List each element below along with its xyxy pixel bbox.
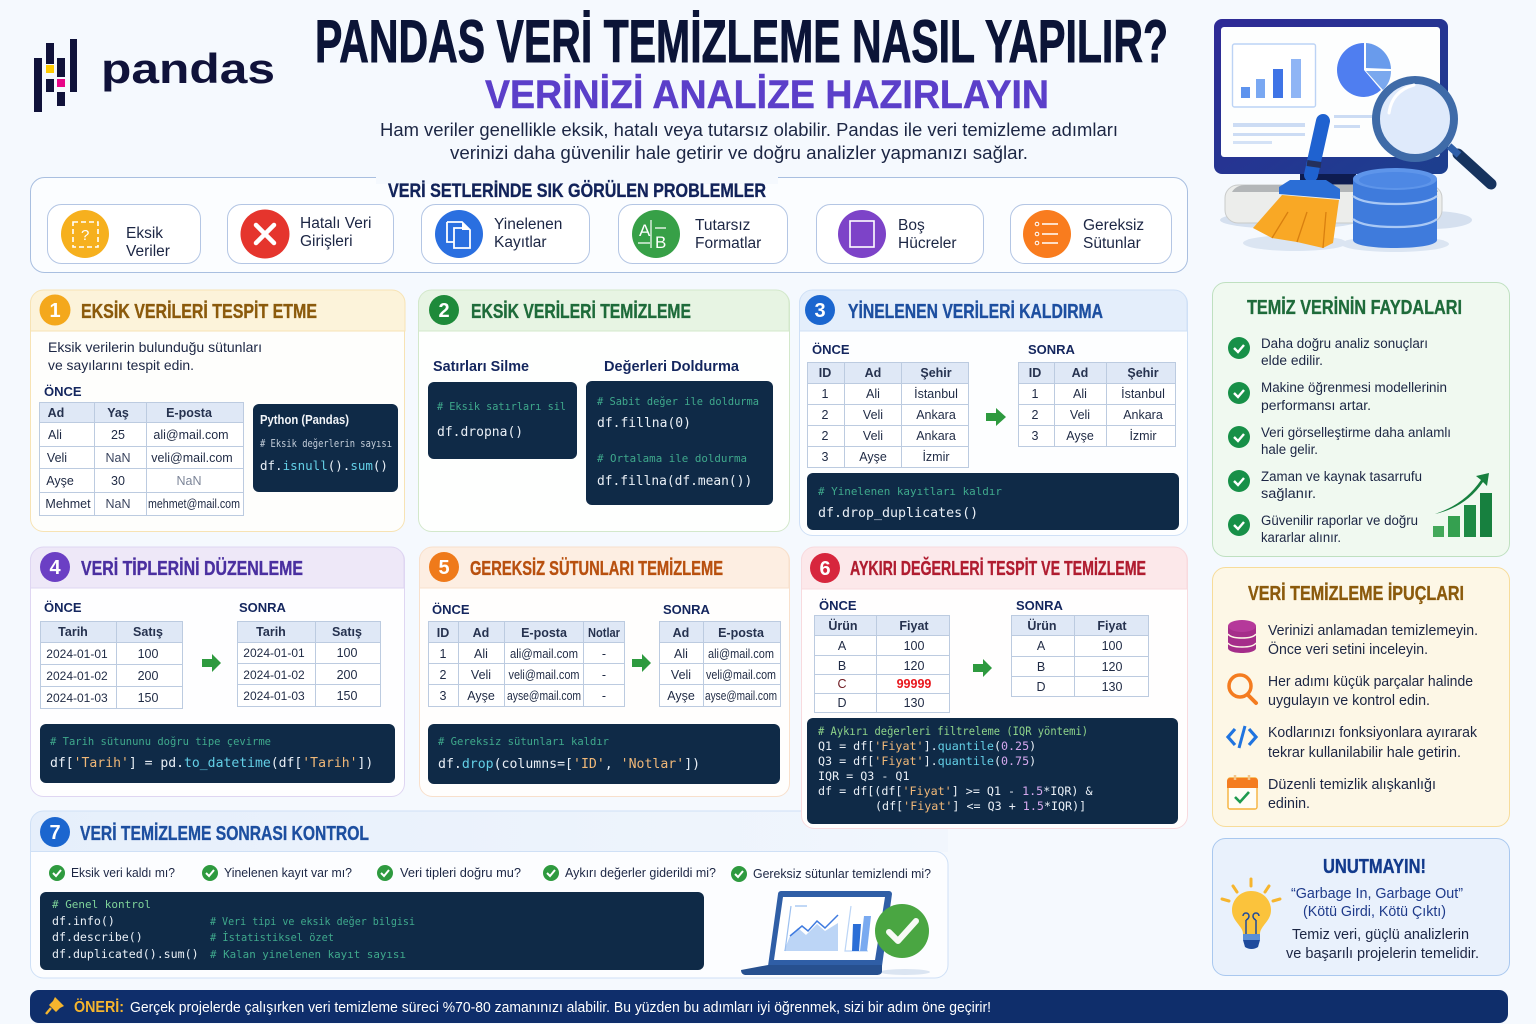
table: after 5: Veli [671, 668, 691, 682]
badge 2: 2 [438, 300, 450, 322]
code block 7: # Veri tipi ve eksik değer bilgisi [210, 915, 415, 928]
code block 7 [40, 892, 704, 970]
badge 6: 6 [819, 558, 831, 580]
panel 2: clean missing data [418, 290, 790, 532]
table: before 6: 99999 [897, 677, 931, 691]
tip 2 [1229, 674, 1473, 709]
code block 5 [428, 724, 780, 784]
table: before 5: ali@mail.com [510, 647, 578, 661]
table: before 1: E-posta [166, 406, 213, 420]
panel 5: remove columns [420, 547, 790, 796]
table: after 3: Ankara [1123, 408, 1163, 422]
panel 3 header [800, 290, 1187, 331]
code block 7: df.info() [52, 914, 115, 928]
badge 4 [40, 552, 70, 582]
code block 4: # Tarih sütununu doğru tipe çevirme [50, 735, 271, 748]
badge 1 [40, 294, 70, 326]
problem card: empty cells: Boş [898, 217, 925, 234]
problem card: missing data: ? [81, 227, 89, 244]
table: after 3: Ayşe [1066, 429, 1094, 443]
table: before 1: ali@mail.com [153, 428, 229, 442]
code block 6: (df['Fiyat'] <= Q3 + 1.5*IQR)] [875, 799, 1086, 813]
table: before 1: Ad [48, 406, 64, 420]
table: after 4: 2024-01-03 [243, 689, 305, 703]
heading 1: EKSİK VERİLERİ TESPİT ETME [81, 300, 317, 323]
benefit 5 [1228, 513, 1418, 545]
heading: benefits: TEMİZ VERİNİN FAYDALARI [1247, 296, 1462, 319]
table: before 5 [428, 622, 624, 706]
code block 4: df['Tarih'] = pd.to_datetime(df['Tarih']) [50, 756, 373, 771]
badge 3 [805, 295, 835, 325]
table: after 3: Ali [1073, 387, 1087, 401]
code block 1: Python (Pandas) [260, 413, 349, 427]
table: before 3 [808, 362, 968, 468]
tip 1: Önce veri setini inceleyin. [1268, 640, 1428, 658]
illustration: laptop with check [741, 891, 930, 975]
benefit 3: Veri görselleştirme daha anlamlı [1261, 425, 1451, 440]
tip 2: Her adımı küçük parçalar halinde [1268, 674, 1473, 690]
table: before 6: C [837, 677, 847, 691]
heading 2: EKSİK VERİLERİ TEMİZLEME [471, 300, 691, 323]
benefit 2: performansı artar. [1261, 398, 1371, 413]
code block 5: # Gereksiz sütunları kaldır [438, 735, 609, 748]
table: after 4: Satış [332, 625, 362, 639]
table: after 3: İzmir [1129, 429, 1157, 443]
panel: remember [1212, 838, 1510, 976]
code block 6: IQR = Q3 - Q1 [818, 769, 909, 783]
table: before 5: Ayşe [467, 689, 495, 703]
bottom bar: tip [30, 990, 1508, 1023]
table: before 5: ayse@mail.com [507, 689, 581, 703]
logo: pandas: pandas [101, 45, 275, 92]
label: before: ÖNCE [819, 598, 857, 613]
table: before 5: - [602, 668, 606, 682]
table: before 3: ID [819, 366, 831, 380]
table: before 1: NaN [176, 474, 202, 488]
code block 7: df.duplicated().sum() [52, 947, 199, 961]
table: after 4: 200 [337, 668, 357, 682]
code block 5: df.drop(columns=['ID', 'Notlar']) [438, 757, 700, 772]
table: before 1: 25 [111, 428, 125, 442]
badge 5: 5 [438, 557, 450, 579]
table: before 1: Veli [47, 451, 67, 465]
table: before 5: Ali [474, 647, 488, 661]
table: after 4 [238, 622, 380, 706]
intro text [380, 120, 1118, 163]
panel 5 header [420, 547, 789, 588]
problem card: empty cells: Hücreler [898, 235, 957, 252]
note: Temiz veri, güçlü analizlerin [1292, 926, 1469, 943]
heading: problems: VERİ SETLERİNDE SIK GÖRÜLEN PROBLEMLER [388, 181, 766, 202]
code block 7: # Genel kontrol [52, 898, 151, 911]
table: before 4: 2024-01-02 [46, 669, 108, 683]
tip 1 [1228, 620, 1478, 658]
benefit 3 [1228, 425, 1451, 457]
code block 1 [253, 404, 398, 492]
problem card: missing data: Veriler [126, 243, 170, 260]
intro text: verinizi daha güvenilir hale getirir ve doğru analizler yapmanızı sağlar. [450, 143, 1028, 163]
subheading: fill values: Değerleri Doldurma [604, 359, 740, 375]
badge 7: 7 [49, 822, 61, 844]
table: before 1: veli@mail.com [151, 451, 233, 465]
table: before 4: 2024-01-03 [46, 691, 108, 705]
label: after: SONRA [663, 602, 711, 617]
table: before 1: Yaş [107, 406, 129, 420]
table: before 1: 30 [111, 474, 125, 488]
panel 1: detect missing data [30, 290, 405, 532]
table: before 3: İstanbul [914, 387, 958, 401]
panel 4: data types [30, 547, 404, 796]
table: after 3: ID [1029, 366, 1041, 380]
logo: pandas [34, 39, 275, 112]
tip text: Gerçek projelerde çalışırken veri temizleme süreci %70-80 zamanınızı alabilir. Bu yüzden bu adımları iyi öğrenmek, sizi bir adım öne geçirir! [130, 1000, 991, 1016]
table: before 6: A [838, 639, 847, 653]
subheading: drop rows: Satırları Silme [433, 359, 529, 375]
table: after 6: 120 [1102, 660, 1122, 674]
table: after 4: 2024-01-01 [243, 646, 305, 660]
table: after 6: Ürün [1027, 618, 1057, 633]
tip 3 [1228, 725, 1478, 761]
table: before 3: İzmir [922, 450, 950, 464]
code block 7: # Kalan yinelenen kayıt sayısı [210, 948, 406, 961]
checklist: Aykırı değerler giderildi mi? [565, 865, 716, 880]
badge 5 [429, 552, 459, 582]
table: before 3: Ankara [916, 408, 956, 422]
code block 3: # Yinelenen kayıtları kaldır [818, 485, 1002, 498]
table: before 5: ID [437, 626, 449, 640]
arrow [202, 654, 221, 672]
table: before 1: Ayşe [46, 474, 74, 488]
code block 7: # İstatistiksel özet [210, 931, 334, 944]
table: after 6 [1012, 616, 1148, 696]
problem card: inconsistent formats: Tutarsız [695, 217, 750, 234]
table: before 4: 2024-01-01 [46, 647, 108, 661]
table: after 3: 3 [1032, 429, 1039, 443]
table: after 4: 2024-01-02 [243, 668, 305, 682]
checklist: Veri tipleri doğru mu? [400, 865, 521, 880]
title: PANDAS VERİ TEMİZLEME NASIL YAPILIR? [315, 8, 1168, 75]
table: before 1: Ali [48, 428, 62, 442]
tip 4: Düzenli temizlik alışkanlığı [1268, 777, 1436, 793]
description 1: ve sayılarını tespit edin. [48, 357, 194, 373]
table: before 5: Veli [471, 668, 491, 682]
icon: pin [46, 997, 64, 1014]
panel: common problems [30, 172, 1188, 272]
table: before 3: 2 [822, 429, 829, 443]
checklist: Gereksiz sütunlar temizlendi mi? [753, 866, 931, 881]
table: before 3: 3 [822, 450, 829, 464]
problem card: missing data: Eksik [126, 225, 163, 242]
code block 1: # Eksik değerlerin sayısı [260, 437, 392, 450]
heading 3: YİNELENEN VERİLERİ KALDIRMA [848, 300, 1103, 323]
table: before 1: NaN [105, 451, 131, 465]
table: after 4: Tarih [256, 625, 286, 639]
table: after 5: ali@mail.com [708, 647, 774, 661]
table: before 6: Fiyat [899, 619, 929, 633]
badge 7 [40, 817, 70, 847]
benefit 5: kararlar alınır. [1261, 530, 1341, 545]
panel 2 header [418, 290, 789, 331]
table: after 3: 1 [1032, 387, 1039, 401]
label: after: SONRA [1028, 342, 1076, 357]
table: after 3: 2 [1032, 408, 1039, 422]
badge 4: 4 [49, 557, 61, 579]
table: before 6 [814, 616, 950, 712]
label: before: ÖNCE [432, 602, 470, 617]
code block 6: # Aykırı değerleri filtreleme (IQR yöntemi) [818, 724, 1088, 738]
description 1 [48, 339, 262, 373]
table: before 3: 2 [822, 408, 829, 422]
label: after: SONRA [1016, 598, 1064, 613]
panel 6: outliers [802, 547, 1188, 828]
table: after 6: D [1036, 680, 1046, 694]
code block: fillna: # Sabit değer ile doldurma [597, 395, 759, 408]
arrow [986, 408, 1006, 426]
heading: remember: UNUTMAYIN! [1323, 856, 1426, 878]
code block: dropna: df.dropna() [437, 425, 523, 440]
quote [1291, 885, 1463, 920]
label: after: SONRA [239, 600, 287, 615]
table: after 5: Ayşe [667, 689, 695, 703]
table: before 3: Ankara [916, 429, 956, 443]
benefit 4 [1228, 469, 1422, 501]
label: tip: ÖNERİ: [74, 997, 124, 1016]
table: after 5: E-posta [718, 626, 765, 640]
icon: light bulb [1222, 879, 1280, 949]
table: before 3: Ali [866, 387, 880, 401]
table: before 1: NaN [105, 497, 131, 511]
panel: tips [1212, 568, 1510, 826]
table: before 6: Ürün [828, 618, 858, 633]
code block 3: df.drop_duplicates() [818, 506, 978, 521]
table: before 3: Ad [865, 366, 881, 380]
table: after 6: 130 [1102, 680, 1122, 694]
heading 5: GEREKSİZ SÜTUNLARI TEMİZLEME [470, 557, 723, 580]
table: before 5: - [602, 689, 606, 703]
benefit 4: Zaman ve kaynak tasarrufu [1261, 469, 1422, 484]
checklist [49, 865, 931, 882]
code block 6 [807, 718, 1178, 824]
heading: tips: VERİ TEMİZLEME İPUÇLARI [1248, 582, 1464, 605]
table: before 5: 3 [440, 689, 447, 703]
panel 1 header [30, 290, 405, 331]
problem card: unnecessary columns [1010, 204, 1172, 264]
code block: dropna [428, 382, 577, 459]
problem card: duplicates: Kayıtlar [494, 234, 547, 251]
table: before 3: Şehir [920, 366, 952, 380]
description 1: Eksik verilerin bulunduğu sütunları [48, 339, 262, 355]
badge 1: 1 [49, 300, 61, 322]
problem card: duplicates: Yinelenen [494, 216, 562, 233]
table: before 4: 100 [138, 647, 158, 661]
problem card: missing data [48, 204, 200, 264]
benefit 5: Güvenilir raporlar ve doğru [1261, 513, 1418, 528]
label: before: ÖNCE [812, 342, 850, 357]
panel 7 header [30, 811, 948, 852]
table: before 6: B [838, 659, 846, 673]
code block: dropna: # Eksik satırları sil [437, 400, 566, 413]
table: after 6: 100 [1102, 639, 1122, 653]
tip 2: uygulayın ve kontrol edin. [1268, 693, 1430, 709]
table: after 5: ayse@mail.com [705, 689, 777, 703]
table: before 5: - [602, 647, 606, 661]
note: ve başarılı projelerin temelidir. [1286, 945, 1479, 962]
arrow [973, 659, 992, 677]
table: before 1: mehmet@mail.com [148, 497, 240, 511]
table: after 6: Fiyat [1097, 619, 1127, 633]
tip 4 [1227, 775, 1436, 812]
table: after 4: 100 [337, 646, 357, 660]
table: before 5: Ad [473, 626, 489, 640]
problem card: inconsistent formats: A [639, 221, 651, 240]
benefit 4: sağlanır. [1261, 486, 1316, 501]
subtitle: VERİNİZİ ANALİZE HAZIRLAYIN [485, 73, 1049, 117]
code block: fillna: df.fillna(df.mean()) [597, 474, 752, 489]
heading 7: VERİ TEMİZLEME SONRASI KONTROL [80, 822, 369, 845]
table: after 5: veli@mail.com [706, 668, 776, 682]
table: before 4: Satış [133, 625, 163, 639]
benefit 1: elde edilir. [1261, 353, 1323, 368]
code block 3 [807, 473, 1179, 530]
table: after 3: Ad [1072, 366, 1088, 380]
table: before 6: 120 [904, 659, 924, 673]
table: before 4 [40, 622, 182, 708]
table: before 6: 100 [904, 639, 924, 653]
problem card: inconsistent formats: Formatlar [695, 235, 761, 252]
table: after 4: 150 [337, 689, 357, 703]
problem card: unnecessary columns: Gereksiz [1083, 217, 1144, 234]
panel: benefits [1212, 282, 1510, 556]
tip 4: edinin. [1268, 796, 1310, 812]
code block 6: Q1 = df['Fiyat'].quantile(0.25) [818, 739, 1036, 753]
problem card: inconsistent formats [618, 204, 788, 264]
illustration: monitor, broom and database [1214, 19, 1491, 252]
checklist: Yinelenen kayıt var mı? [224, 865, 352, 880]
tip 3: Kodlarınızı fonksiyonlara ayırarak [1268, 725, 1478, 741]
table: after 5: Ali [674, 647, 688, 661]
code block: fillna [586, 381, 773, 505]
problem card: duplicates [422, 204, 590, 264]
tip 3: tekrar kullanilabilir hale getirin. [1268, 745, 1461, 761]
table: before 5: E-posta [521, 626, 568, 640]
table: before 6: D [837, 696, 847, 710]
benefit 1: Daha doğru analiz sonuçları [1261, 336, 1428, 351]
benefit 2 [1228, 380, 1447, 413]
table: before 1 [40, 402, 244, 516]
badge 3: 3 [814, 300, 826, 322]
problem card: wrong entries: Hatalı Veri [300, 215, 372, 232]
table: before 5: Notlar [588, 626, 620, 640]
code block 1: df.isnull().sum() [260, 458, 388, 473]
panel 7: final check [30, 811, 948, 978]
code block 4 [40, 724, 395, 783]
arrow [632, 654, 651, 672]
table: before 4: 150 [138, 691, 158, 705]
problem card: wrong entries: Girişleri [300, 233, 353, 250]
code block 7: df.describe() [52, 930, 143, 944]
table: before 3: Veli [863, 429, 883, 443]
code block: fillna: # Ortalama ile doldurma [597, 452, 747, 465]
panel 6 header [802, 547, 1187, 589]
table: before 4: 200 [138, 669, 158, 683]
code block 6: Q3 = df['Fiyat'].quantile(0.75) [818, 754, 1036, 768]
checklist: Eksik veri kaldı mı? [71, 865, 175, 880]
badge 6 [810, 553, 840, 583]
benefit 2: Makine öğrenmesi modellerinin [1261, 380, 1447, 395]
table: after 5: Ad [673, 626, 689, 640]
table: after 3 [1018, 362, 1176, 446]
heading 6: AYKIRI DEĞERLERİ TESPİT VE TEMİZLEME [850, 556, 1146, 580]
intro text: Ham veriler genellikle eksik, hatalı veya tutarsız olabilir. Pandas ile veri temizleme adımları [380, 120, 1118, 140]
tip 1: Verinizi anlamadan temizlemeyin. [1268, 623, 1478, 639]
table: after 5 [660, 622, 780, 706]
code block: fillna: df.fillna(0) [597, 416, 691, 431]
table: after 3: İstanbul [1121, 387, 1165, 401]
quote: “Garbage In, Garbage Out” [1291, 885, 1463, 902]
note [1286, 926, 1479, 962]
panel 4 header [30, 547, 404, 588]
quote: (Kötü Girdi, Kötü Çıktı) [1303, 903, 1446, 920]
table: before 5: veli@mail.com [508, 668, 580, 682]
table: before 3: Ayşe [859, 450, 887, 464]
benefit 3: hale gelir. [1261, 442, 1318, 457]
table: before 4: Tarih [58, 625, 88, 639]
table: before 1: Mehmet [45, 497, 91, 511]
table: before 5: 2 [440, 668, 447, 682]
heading 4: VERİ TİPLERİNİ DÜZENLEME [81, 557, 303, 580]
benefit 1 [1228, 336, 1428, 368]
table: after 6: B [1037, 660, 1045, 674]
problem card: unnecessary columns: Sütunlar [1083, 235, 1141, 252]
table: after 6: A [1037, 639, 1046, 653]
table: before 3: Veli [863, 408, 883, 422]
table: after 3: Şehir [1127, 366, 1159, 380]
panel 3: remove duplicates [800, 290, 1188, 536]
table: before 5: 1 [440, 647, 447, 661]
label: before: ÖNCE [44, 600, 82, 615]
label: before: ÖNCE [44, 384, 82, 399]
badge 2 [429, 295, 459, 325]
problem card: inconsistent formats: B [655, 233, 666, 252]
table: after 3: Veli [1070, 408, 1090, 422]
code block 6: df = df[(df['Fiyat'] >= Q1 - 1.5*IQR) & [818, 784, 1092, 798]
icon: growth chart [1433, 473, 1492, 537]
table: before 3: 1 [822, 387, 829, 401]
problem card: empty cells [816, 204, 984, 264]
table: before 6: 130 [904, 696, 924, 710]
problem card: wrong entries [228, 204, 394, 264]
